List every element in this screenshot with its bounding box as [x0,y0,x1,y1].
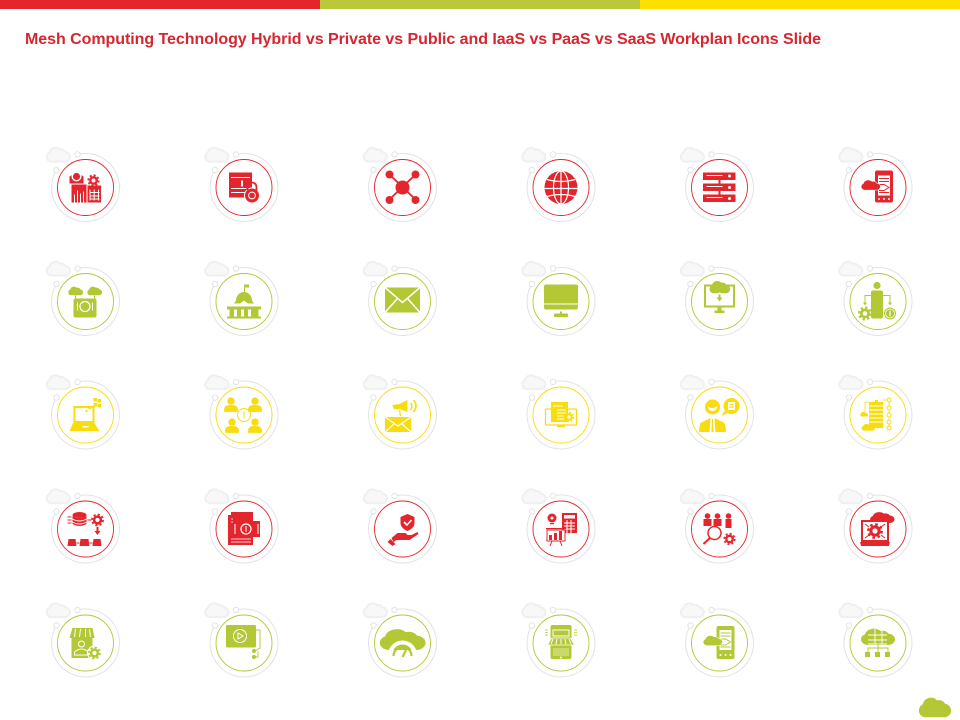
icon: laptop with blocks [70,398,101,431]
cell: browser lock [205,148,278,221]
frame [205,262,278,335]
icon: document on monitor [546,402,576,427]
frame [839,375,912,449]
cell: people dollar [205,375,278,449]
icon: database and workflow [68,512,103,546]
icon: clouds and tablet [68,287,102,318]
frame [47,375,120,449]
cell: shop [47,603,120,677]
icon: cloud laptop gear [860,512,895,546]
cell: money documents [205,489,278,563]
top bar: red segment [0,0,320,9]
frame [47,262,120,335]
icon: megaphone and mail [385,400,416,432]
cell: laptop cloud gear [839,489,912,563]
cell: calculator chart [522,489,595,563]
cell: people search [681,489,754,563]
cell: globe [522,148,595,221]
icon: banknote on documents [228,512,260,545]
frame [205,489,278,563]
top bar: green segment [320,0,640,9]
icon: cloud to phone [861,170,893,202]
frame [681,375,754,449]
cell: hand shield [364,489,437,563]
frame [205,603,278,677]
icon: finance calculator [70,172,101,202]
icon: online shop [70,628,102,660]
icon: person with gear and dollar [859,282,896,320]
icon: cloud download monitor [705,281,734,313]
frame [522,375,595,449]
cell: server list [839,375,912,449]
cell: cloud phone [839,148,912,221]
cell: capitol [205,262,278,335]
cell: laptop blocks [47,375,120,449]
frame [522,262,595,335]
frame [364,262,437,335]
icon: people search and gear [704,513,735,544]
cell: megaphone mail [364,375,437,449]
cell: mobile shop [522,603,595,677]
cell: envelope [364,262,437,335]
frame [364,603,437,677]
icon: envelope [385,288,420,312]
icon: cloud speed gauge [380,629,426,657]
frame [839,489,912,563]
frame [839,148,912,221]
cell: cloud gauge [364,603,437,677]
frame [47,148,120,221]
frame [681,262,754,335]
icon: data list with clouds [860,398,891,431]
icon: browser lock [229,172,260,204]
icon: government building [227,284,261,318]
cell: monitor [522,262,595,335]
cell: video [205,603,278,677]
cell: cloud download [681,262,754,335]
top bar: yellow segment [640,0,960,9]
frame [364,148,437,221]
frame [681,148,754,221]
frame [364,489,437,563]
frame [681,489,754,563]
cell: database workflow [47,489,120,563]
icon: corner cloud [919,698,951,717]
cell: document monitor [522,375,595,449]
frame [522,603,595,677]
frame [47,603,120,677]
icon: people around dollar [224,397,262,433]
cell: cloud phone [681,603,754,677]
icon: desktop monitor [544,284,578,317]
cell: servers [681,148,754,221]
icon: globe [544,171,578,204]
cell: cloud network [839,603,912,677]
cell: person gear dollar [839,262,912,335]
icon: network nodes [386,170,420,204]
icon: idea calculator and chart [546,513,577,546]
icon: person with speech bubble [699,398,740,432]
icon: hand holding shield [388,514,418,546]
frame [839,603,912,677]
cell: network [364,148,437,221]
icon: cloud to mobile [703,626,734,659]
icon: server stack [703,172,736,202]
cell: finance [47,148,120,221]
frame [364,375,437,449]
icon: video player [226,625,260,659]
title: Mesh Computing Technology Hybrid vs Private vs Public and IaaS vs PaaS vs SaaS Workplan Icons Slide [25,31,821,48]
frame [681,603,754,677]
frame [839,262,912,335]
frame [47,489,120,563]
frame [205,375,278,449]
frame [522,148,595,221]
icon: cloud database network [861,629,895,657]
cell: person speech [681,375,754,449]
icon: mobile store [545,625,577,659]
frame [522,489,595,563]
frame [205,148,278,221]
cell: cloud tablet [47,262,120,335]
